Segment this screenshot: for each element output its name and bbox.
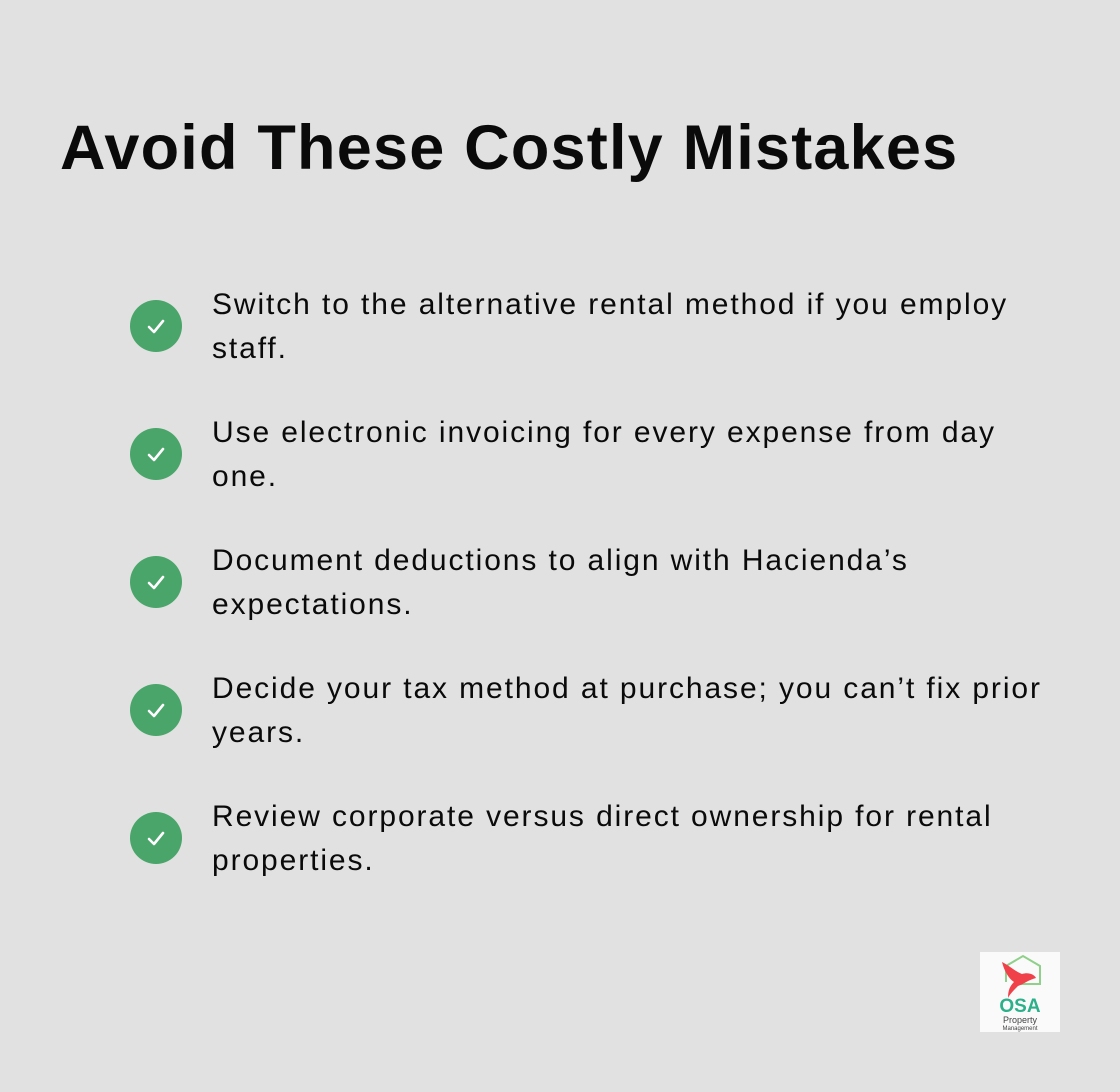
text	[212, 672, 1042, 749]
text: Decide your tax method at purchase; you can’t fix prior	[212, 672, 1042, 705]
text: Document deductions to align with Hacienda’s	[212, 544, 909, 577]
text: one.	[212, 460, 278, 493]
item 5	[130, 800, 993, 877]
item 2	[130, 416, 996, 493]
icon: check	[130, 428, 182, 480]
logo: Property	[1003, 1015, 1038, 1025]
item 4	[130, 672, 1042, 749]
item 1	[130, 288, 1008, 365]
text: Switch to the alternative rental method if you employ	[212, 288, 1008, 321]
text: staff.	[212, 332, 288, 365]
icon: check	[130, 300, 182, 352]
logo	[980, 952, 1060, 1032]
text: Use electronic invoicing for every expense from day	[212, 416, 996, 449]
logo: Management	[1002, 1026, 1038, 1032]
text: properties.	[212, 844, 375, 877]
item 3	[130, 544, 909, 621]
text: years.	[212, 716, 305, 749]
icon: check	[130, 812, 182, 864]
text	[212, 416, 996, 493]
text: Review corporate versus direct ownership for rental	[212, 800, 993, 833]
text	[212, 288, 1008, 365]
text	[212, 544, 909, 621]
text	[212, 800, 993, 877]
title: Avoid These Costly Mistakes	[60, 113, 958, 183]
text: expectations.	[212, 588, 413, 621]
icon: check	[130, 684, 182, 736]
icon: check	[130, 556, 182, 608]
logo: OSA	[999, 996, 1041, 1017]
